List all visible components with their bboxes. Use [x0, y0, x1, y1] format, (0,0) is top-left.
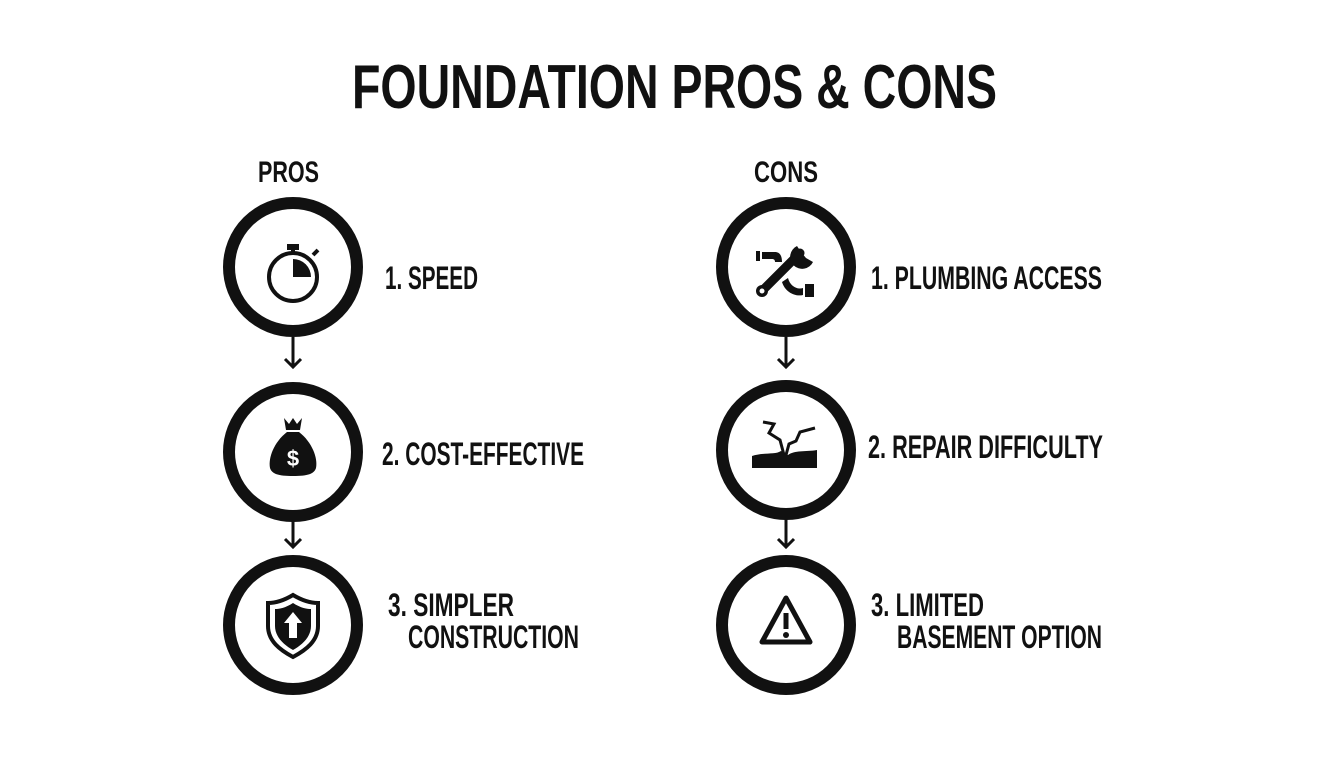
title: FOUNDATION PROS & CONS	[352, 53, 997, 122]
panel: pros	[229, 203, 584, 689]
heading: pros: PROS	[258, 156, 319, 189]
circle: cost	[229, 388, 357, 516]
label: cost-effective: 2. COST-EFFECTIVE	[382, 436, 584, 472]
label: plumbing access: 1. PLUMBING ACCESS	[871, 260, 1102, 296]
circle: speed	[229, 203, 357, 331]
circle: basement	[722, 561, 850, 689]
panel: cons	[722, 203, 1103, 689]
label: simpler construction: 3. SIMPLER	[388, 587, 514, 623]
circle: plumbing	[722, 203, 850, 331]
label: limited basement option	[871, 587, 1102, 655]
icon: shield	[268, 595, 318, 657]
label: speed: 1. SPEED	[385, 260, 478, 296]
circle: simpler	[229, 561, 357, 689]
label: repair difficulty: 2. REPAIR DIFFICULTY	[868, 429, 1103, 465]
arrow 2	[778, 518, 794, 547]
arrow 1	[285, 337, 301, 367]
icon: crack	[752, 422, 817, 468]
label: limited basement option: BASEMENT OPTION	[897, 619, 1102, 655]
label: simpler construction	[388, 587, 579, 655]
circle: repair	[722, 386, 850, 514]
heading: cons: CONS	[754, 156, 818, 189]
arrow 2	[285, 520, 301, 547]
icon: wrench and pipes	[756, 246, 814, 297]
label: limited basement option: 3. LIMITED	[871, 587, 984, 623]
label: simpler construction: CONSTRUCTION	[408, 619, 579, 655]
arrow 1	[778, 337, 794, 367]
icon: money bag: $	[287, 446, 299, 471]
icon: stopwatch	[269, 244, 318, 301]
icon: warning	[762, 598, 810, 642]
